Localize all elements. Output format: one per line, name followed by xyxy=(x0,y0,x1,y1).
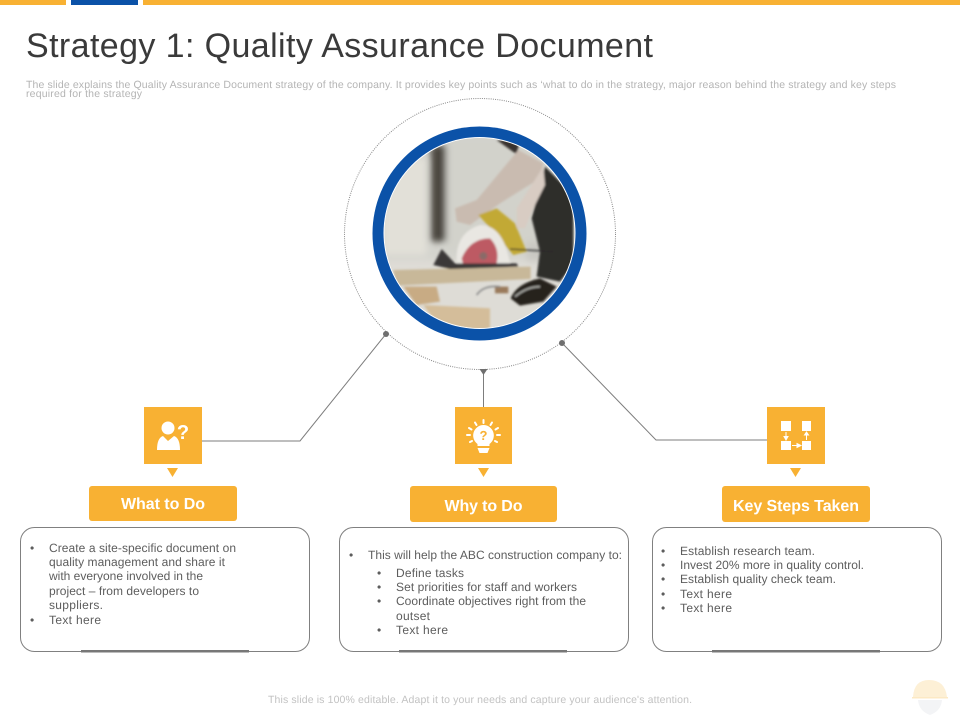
panel: what to do xyxy=(20,528,310,652)
pointer: key steps xyxy=(790,468,801,477)
description text: The slide explains the Quality Assurance Document strategy of the company. It provides key points such as ‘what to do in the strategy, major reason behind the strategy and key steps xyxy=(26,79,896,91)
icon: hard hat and gear watermark xyxy=(912,680,948,715)
list: why to do: • xyxy=(377,566,381,580)
list: what to do: • xyxy=(30,541,34,555)
list: key steps taken: Establish quality check team. xyxy=(680,572,836,586)
wood and floor xyxy=(393,267,531,286)
list: key steps taken: Text here xyxy=(680,587,732,601)
photo circle: worker with circular saw xyxy=(372,126,586,340)
connector: left xyxy=(202,331,389,441)
list: what to do: with everyone involved in the xyxy=(48,569,203,583)
list: what to do xyxy=(30,541,236,627)
heading: Why to Do xyxy=(410,486,557,522)
footer note: This slide is 100% editable. Adapt it to your needs and capture your audience's attention. xyxy=(268,694,692,706)
list: what to do: suppliers. xyxy=(49,598,103,612)
saw xyxy=(478,208,527,255)
list: why to do: • xyxy=(377,594,381,608)
list: why to do: This will help the ABC construction company to: xyxy=(368,548,622,562)
arm xyxy=(455,150,543,225)
panel: why to do xyxy=(340,528,628,652)
list: why to do: Define tasks xyxy=(396,566,464,580)
list: key steps taken: Text here xyxy=(680,601,732,615)
pointer: what to do xyxy=(167,468,178,477)
list: what to do: quality management and share it xyxy=(49,555,226,569)
list: key steps taken: • xyxy=(661,572,665,586)
list: why to do: outset xyxy=(396,609,431,623)
top accent bars xyxy=(0,0,960,5)
list: why to do: • xyxy=(377,623,381,637)
list: key steps taken: • xyxy=(661,587,665,601)
list: key steps taken xyxy=(661,544,864,615)
list: what to do: Create a site-specific document on xyxy=(49,541,236,555)
icon tile: person with question mark: ? xyxy=(177,422,189,444)
heading: What to Do xyxy=(89,486,237,521)
title: Strategy 1: Quality Assurance Document xyxy=(26,27,654,65)
icon tile: light bulb with question mark xyxy=(455,407,512,464)
icon tile: light bulb with question mark: ? xyxy=(480,428,488,443)
list: key steps taken: • xyxy=(661,601,665,615)
heading: Key Steps Taken xyxy=(722,486,870,522)
list: why to do: Text here xyxy=(396,623,448,637)
heading: Why to Do: Why to Do xyxy=(444,498,523,515)
description text: required for the strategy xyxy=(26,88,143,100)
list: key steps taken: Invest 20% more in quality control. xyxy=(680,558,864,572)
connector: right xyxy=(559,340,767,440)
panel: key steps taken xyxy=(652,528,942,652)
list: why to do: • xyxy=(349,548,353,562)
list: key steps taken: Establish research team. xyxy=(680,544,815,558)
list: why to do: Coordinate objectives right from the xyxy=(396,594,586,608)
icon tile: person with question mark xyxy=(144,407,202,464)
list: why to do xyxy=(349,548,622,637)
icon tile: process flow squares xyxy=(767,407,825,464)
list: key steps taken: • xyxy=(661,558,665,572)
description text xyxy=(26,79,896,100)
list: key steps taken: • xyxy=(661,544,665,558)
pointer: why to do xyxy=(478,468,489,477)
list: what to do: project – from developers to xyxy=(49,584,199,598)
list: why to do: • xyxy=(377,580,381,594)
dark trouser leg xyxy=(532,167,573,282)
heading: What to Do: What to Do xyxy=(121,496,205,513)
list: what to do: • xyxy=(30,613,34,627)
list: what to do: Text here xyxy=(49,613,101,627)
dotted outer ring xyxy=(344,98,616,370)
connector: center xyxy=(480,369,488,407)
list: why to do: Set priorities for staff and workers xyxy=(396,580,577,594)
boot xyxy=(511,278,557,306)
heading: Key Steps Taken: Key Steps Taken xyxy=(733,498,859,515)
